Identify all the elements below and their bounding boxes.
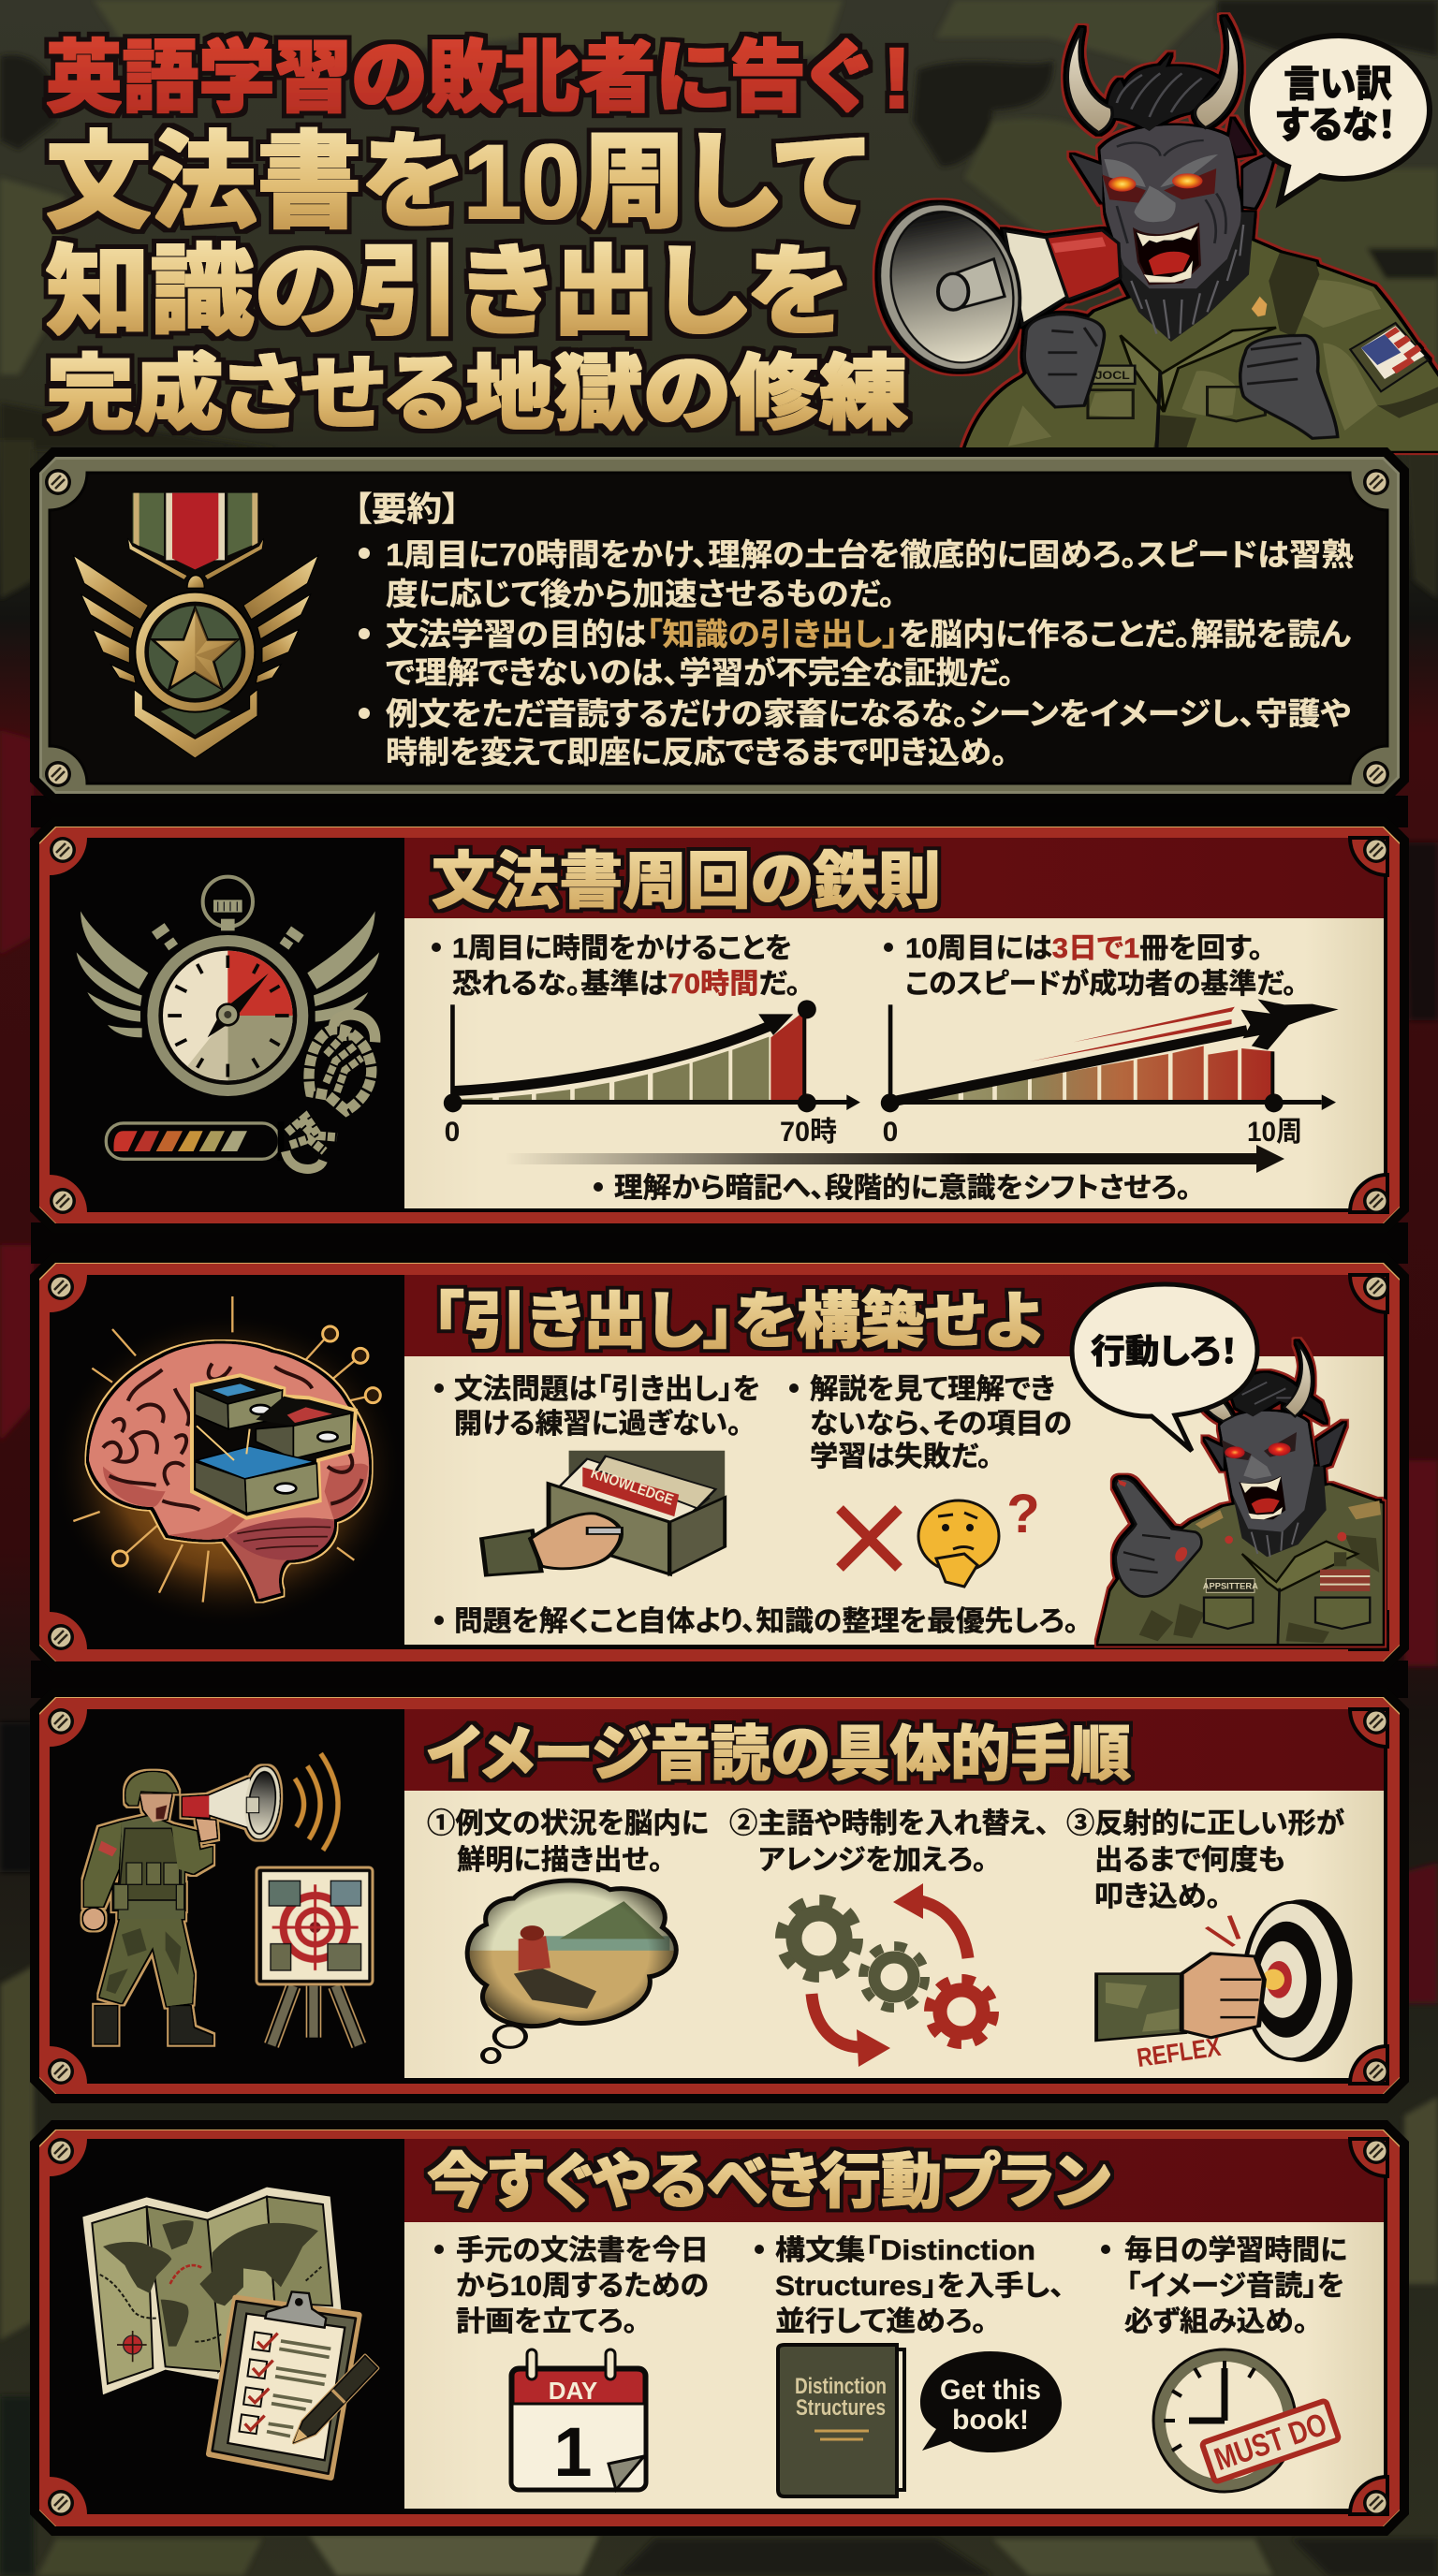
speech bubble: 行動しろ: [1072, 1284, 1257, 1451]
text: plan 3: 「イメージ音読」を: [1126, 2271, 1344, 2302]
icon: hand opening knowledge drawer: KNOWLEDGE: [589, 1466, 675, 1509]
text block: summary bullets: 度に応じて後から加速させるものだ。: [386, 577, 895, 611]
heading: イメージ音読の具体的手順: [427, 1720, 1131, 1788]
megaphone bell: [862, 192, 1037, 382]
text: 解説: 解説を見て理解でき: [810, 1374, 1055, 1405]
speech bubble: Get this book: Get this: [940, 2375, 1041, 2406]
icon: gold medal: [73, 493, 318, 758]
gripping fist: [1024, 315, 1104, 407]
speech bubble: 言い訳するな: [1247, 36, 1430, 202]
heading: 「引き出し」を構築せよ: [432, 1286, 1042, 1355]
chart: 10周目 jet speed: [881, 999, 1339, 1148]
chart: 1周目 70時間 curve: [444, 1000, 860, 1148]
icon: Distinction Structures book: [778, 2345, 904, 2496]
text: step 2: ②主語や時制を入れ替え、: [729, 1808, 1049, 1839]
pockets: [1088, 387, 1265, 421]
icon: clock with MUST DO stamp: MUST DO: [1211, 2407, 1331, 2478]
heading: 文法書周回の鉄則: [432, 846, 941, 915]
text: plan 2: 構文集「Distinction: [775, 2235, 1035, 2266]
hair: [1108, 53, 1220, 131]
icon: red X and thinking face: ?: [1006, 1484, 1040, 1544]
text block: summary bullets: 文法学習の目的は 「知識の引き出し」 を脳内に作ることだ。解説を読ん: [386, 617, 1351, 651]
text: 段階的シフト: 理解から暗記へ、段階的に意識をシフトさせろ。: [614, 1173, 1191, 1204]
collar pin: [1252, 297, 1267, 316]
text: 解説: ないなら、その項目の: [810, 1409, 1072, 1440]
text: step 3: 出るまで何度も: [1094, 1845, 1285, 1876]
panel: 今すぐやるべき行動プラン: [35, 2125, 1404, 2531]
chart: 1周目 70時間 curve: 70時: [780, 1117, 837, 1148]
ears: [1072, 154, 1102, 203]
icon: red X and thinking face: [840, 1484, 1040, 1587]
text: 文法問題: [434, 1374, 760, 1440]
icon: hand opening knowledge drawer: [481, 1451, 725, 1575]
text: step 3: 叩き込め。: [1094, 1881, 1221, 1912]
chart: 10周目 jet speed: 10周: [1247, 1117, 1302, 1148]
text: step 1: [427, 1808, 709, 1876]
text: step 3: ③反射的に正しい形が: [1066, 1808, 1344, 1839]
icon: soldier with megaphone, target board: [83, 1753, 373, 2045]
raised fist: [1240, 335, 1338, 438]
icon: thought cloud with scene: [459, 1872, 688, 2062]
text: 1周目: [432, 933, 800, 1000]
face: [1100, 125, 1241, 288]
text: 1周目: 1周目に時間をかけることを: [452, 933, 792, 964]
text block: summary bullets: 1周目に70時間をかけ、理解の土台を徹底的に固めろ。スピードは習熟: [386, 537, 1354, 572]
text: plan 3: [1101, 2235, 1347, 2337]
text: 10周目: このスピードが成功者の基準だ。: [905, 968, 1297, 1000]
speech bubble: Get this book: book!: [952, 2405, 1029, 2436]
text: 10周目: 10周目には3日で1冊を回す。: [905, 933, 1263, 964]
icon: fist hitting target: [1096, 1899, 1353, 2072]
demon pointing: [1098, 1341, 1383, 1644]
beard: [1109, 212, 1255, 342]
text: 文法問題: 文法問題は「引き出し」を: [454, 1374, 760, 1405]
title line 3: 知識の引き出しを: [46, 238, 847, 347]
icon: Distinction Structures book: Structures: [796, 2395, 886, 2421]
text: plan 2: 並行して進めろ。: [775, 2306, 987, 2337]
text: plan 2: [755, 2235, 1064, 2337]
icon: day 1 calendar: 1: [553, 2413, 593, 2491]
speech bubble: 言い訳するな: するな！: [1276, 105, 1396, 146]
mouth: [1134, 224, 1200, 284]
text: 文法問題: 開ける練習に過ぎない。: [454, 1409, 741, 1440]
icon: day 1 calendar: DAY: [549, 2377, 597, 2405]
title line 2: 文法書を10周して: [46, 124, 867, 241]
text block: summary bullets: 時制を変えて即座に反応できるまで叩き込め。: [386, 735, 1007, 769]
text: plan 2: Structures」を入手し、: [775, 2271, 1064, 2302]
text block: summary bullets: 例文をただ音読するだけの家畜になるな。シーンをイメージし、守護や: [386, 696, 1351, 731]
chart: 10周目 jet speed: 0: [883, 1117, 898, 1148]
megaphone horn: [1005, 231, 1068, 325]
panel: 文法書周回の鉄則: [35, 822, 1404, 1228]
speech bubble: 行動しろ: 行動しろ！: [1091, 1332, 1238, 1370]
nose: [1134, 185, 1176, 222]
text: plan 3: 必ず組み込め。: [1124, 2306, 1308, 2337]
panel: イメージ音読の具体的手順: [35, 1692, 1404, 2099]
text: 解説: [789, 1374, 1072, 1472]
text block: summary bullets: で理解できないのは、学習が不完全な証拠だ。: [386, 655, 1014, 690]
text: step 2: [729, 1808, 1049, 1876]
flag patch: [1350, 323, 1428, 391]
speech bubble: 言い訳するな: 言い訳: [1284, 64, 1392, 105]
collar: [1121, 328, 1276, 412]
text: step 1: ①例文の状況を脳内に: [427, 1808, 709, 1839]
brows and eyes: [1104, 154, 1218, 187]
heading: 要約: 【要約】: [354, 490, 460, 528]
demon pointing: APPSITTERA: [1203, 1581, 1258, 1590]
title line 4: 完成させる地獄の修練: [46, 347, 908, 440]
icon: brain with drawers: [50, 1296, 405, 1629]
text: 1周目: 恐れるな。基準は 70時間だ。: [452, 969, 800, 1000]
arrow: 理解から暗記へ: [505, 1145, 1284, 1173]
icon: clock with MUST DO stamp: [1153, 2349, 1339, 2492]
demon drill sergeant with megaphone: [862, 17, 1438, 451]
icon: map and checklist clipboard: [82, 2188, 377, 2478]
text: step 1: 鮮明に描き出せ。: [457, 1845, 663, 1876]
text: 問題を解く: 問題を解くこと自体より、知識の整理を最優先しろ。: [454, 1606, 1078, 1637]
icon: gears and rotation arrows: [781, 1883, 994, 2067]
text: plan 1: 計画を立てろ。: [456, 2306, 638, 2337]
text: plan 3: 毎日の学習時間に: [1124, 2235, 1347, 2266]
name tape: JOCL: [1095, 369, 1130, 382]
jacket: [965, 241, 1438, 451]
title line 1: red warning: !: [883, 31, 911, 126]
text: step 3: [1066, 1808, 1344, 1912]
name tape: [1088, 366, 1135, 384]
horns: [1067, 28, 1112, 133]
icon: winged stopwatch and boot prints: [77, 877, 379, 1169]
text: 10周目: [884, 933, 1297, 1000]
text: plan 1: [434, 2235, 709, 2337]
panel: summary: [35, 452, 1404, 798]
heading: 今すぐやるべき行動プラン: [427, 2148, 1110, 2216]
text block: summary bullets: [359, 537, 1354, 769]
panel: 引き出しを構築せよ: [35, 1258, 1404, 1666]
text: step 2: アレンジを加えろ。: [758, 1845, 987, 1876]
text: plan 1: 手元の文法書を今日: [456, 2235, 709, 2266]
icon: Distinction Structures book: Distinction: [795, 2374, 887, 2399]
icon: day 1 calendar: [511, 2349, 646, 2491]
speech bubble: Get this book: [920, 2351, 1062, 2452]
chart: 1周目 70時間 curve: 0: [445, 1117, 460, 1148]
title line 1: red warning: 英語学習の敗北者に告ぐ: [46, 34, 868, 122]
icon: fist hitting target: REFLEX: [1135, 2032, 1223, 2072]
text: plan 1: から10周するための: [456, 2271, 709, 2302]
title block: [46, 31, 911, 440]
text: 解説: 学習は失敗だ。: [810, 1442, 991, 1472]
